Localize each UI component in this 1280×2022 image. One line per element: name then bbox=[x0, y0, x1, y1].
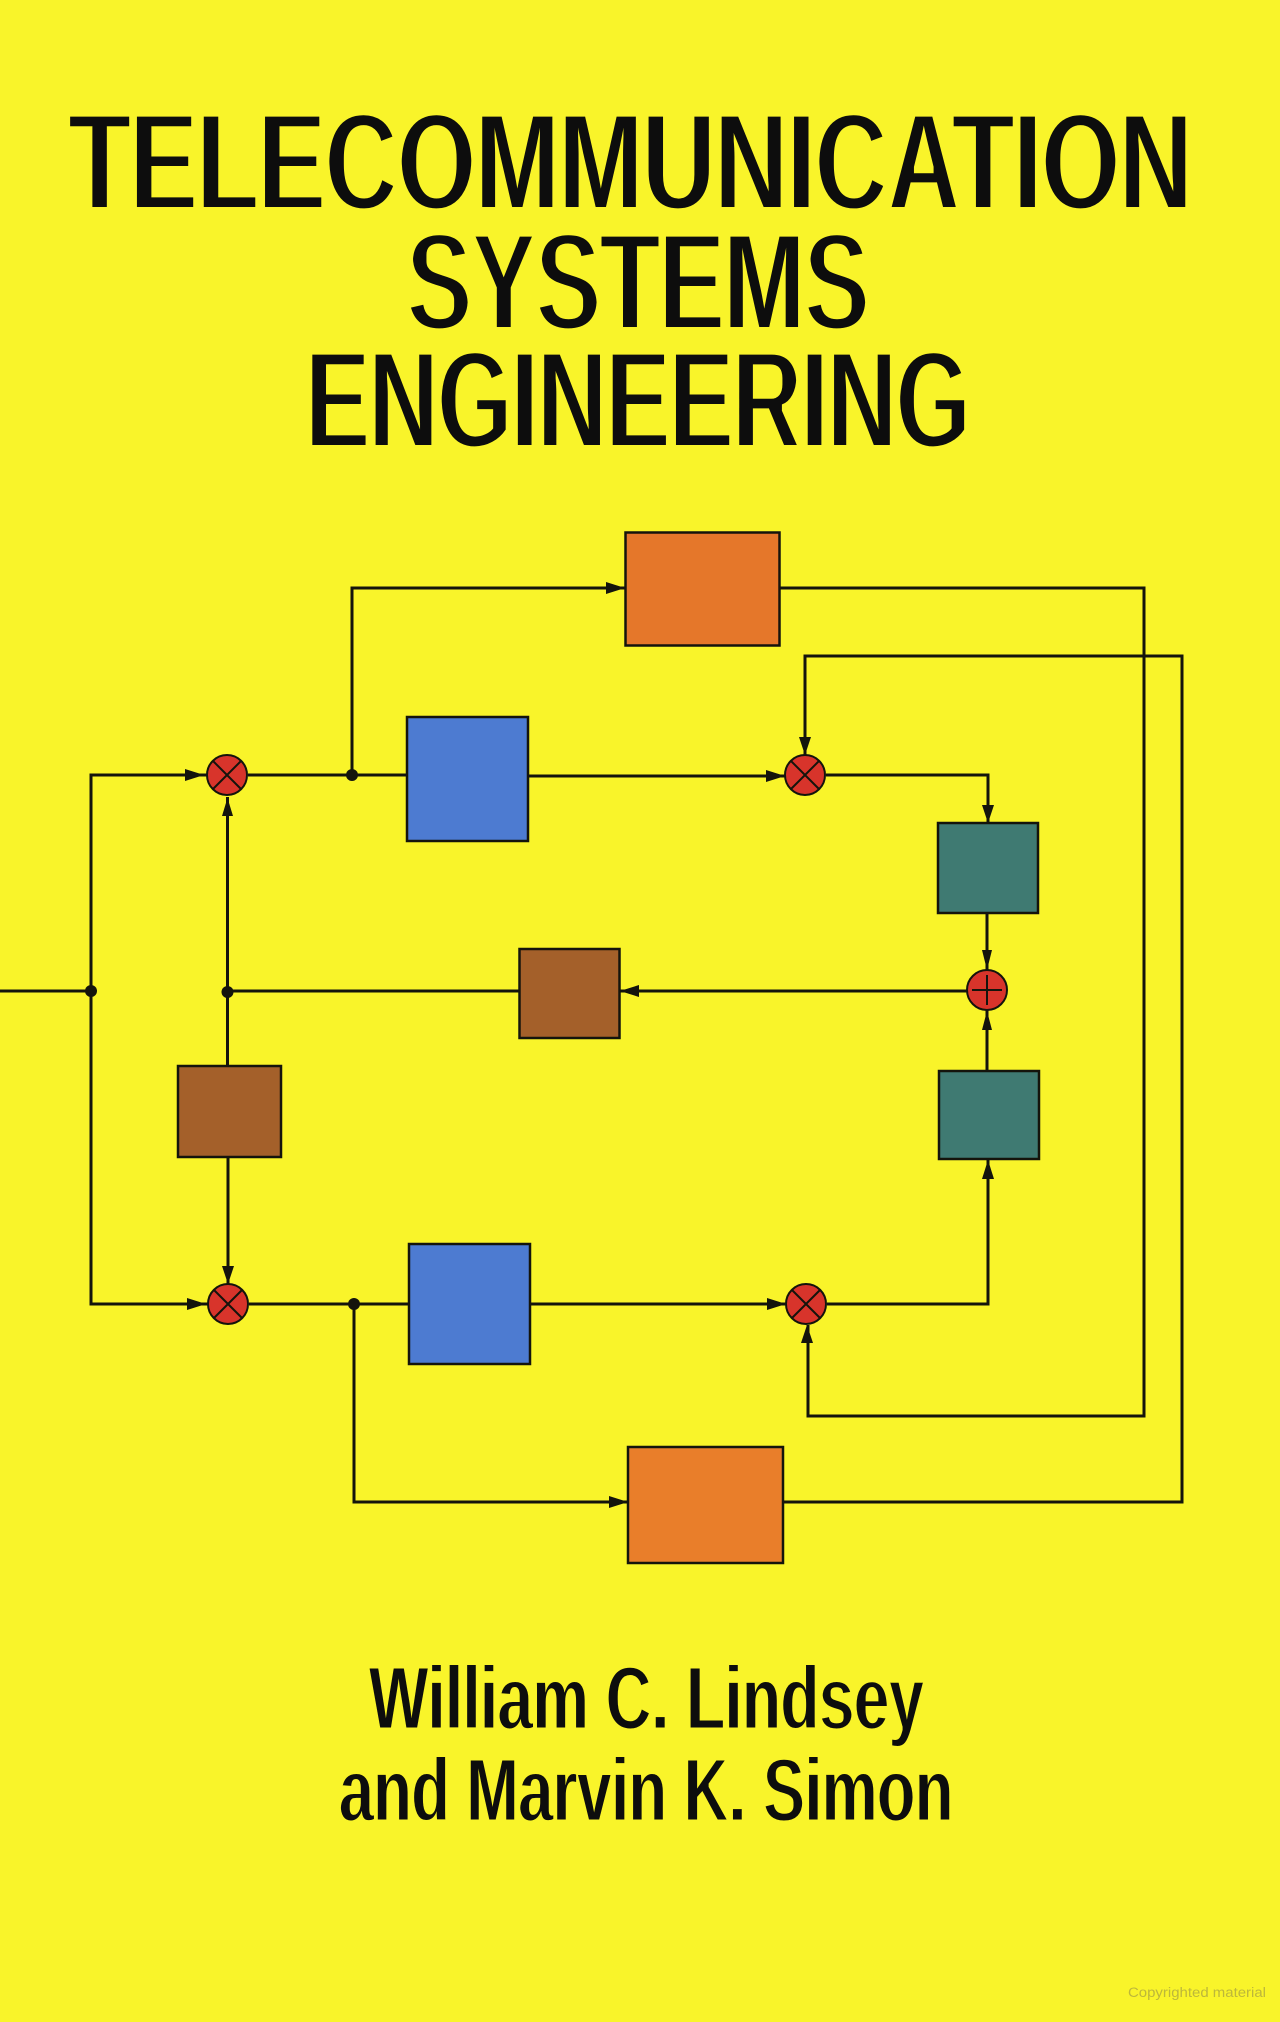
blue block upper bbox=[407, 717, 528, 841]
authors bbox=[339, 1649, 953, 1841]
title: SYSTEMS bbox=[407, 203, 869, 360]
block diagram bbox=[0, 532, 1182, 1563]
orange block bottom bbox=[628, 1447, 783, 1563]
multiplier top right bbox=[785, 755, 825, 795]
signal lines bbox=[0, 588, 1182, 1502]
title bbox=[69, 83, 1192, 478]
orange block top bbox=[626, 532, 780, 646]
summing junction bbox=[967, 970, 1007, 1010]
multiplier bottom right bbox=[786, 1284, 826, 1324]
junction dots bbox=[85, 769, 360, 1310]
multiplier bottom left bbox=[208, 1284, 248, 1324]
brown block left bbox=[178, 1066, 281, 1157]
authors: and Marvin K. Simon bbox=[339, 1741, 953, 1841]
teal block lower bbox=[939, 1071, 1039, 1159]
title: ENGINEERING bbox=[306, 321, 970, 478]
teal block upper bbox=[938, 823, 1038, 913]
arrowheads bbox=[185, 582, 994, 1508]
blue block lower bbox=[409, 1244, 530, 1364]
authors: William C. Lindsey bbox=[369, 1649, 924, 1749]
multiplier top left bbox=[207, 755, 247, 795]
brown block middle bbox=[520, 949, 620, 1038]
copyright notice: Copyrighted material bbox=[1128, 1985, 1266, 2000]
